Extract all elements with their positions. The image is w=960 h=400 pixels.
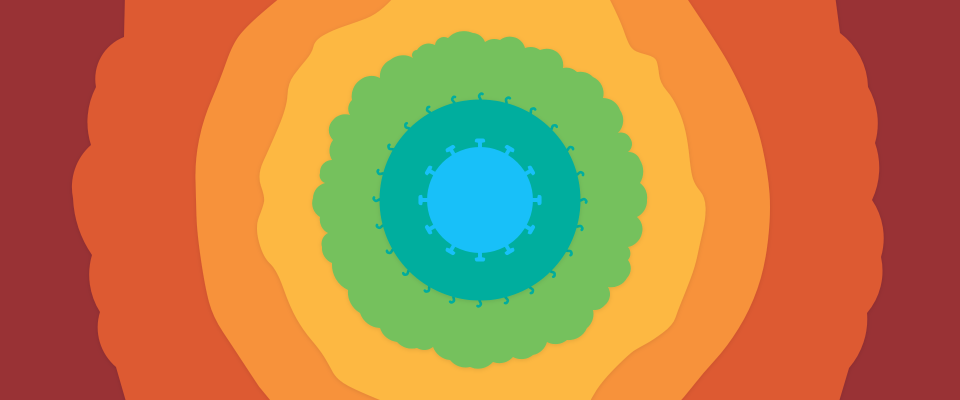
ring: green bumpy layer (312, 31, 647, 369)
icon: teal virus with hooked spikes (374, 94, 586, 306)
ring: orange layer (195, 0, 770, 400)
icon: blue virus core with spikes (419, 139, 541, 261)
ring: yellow layer (257, 0, 706, 400)
